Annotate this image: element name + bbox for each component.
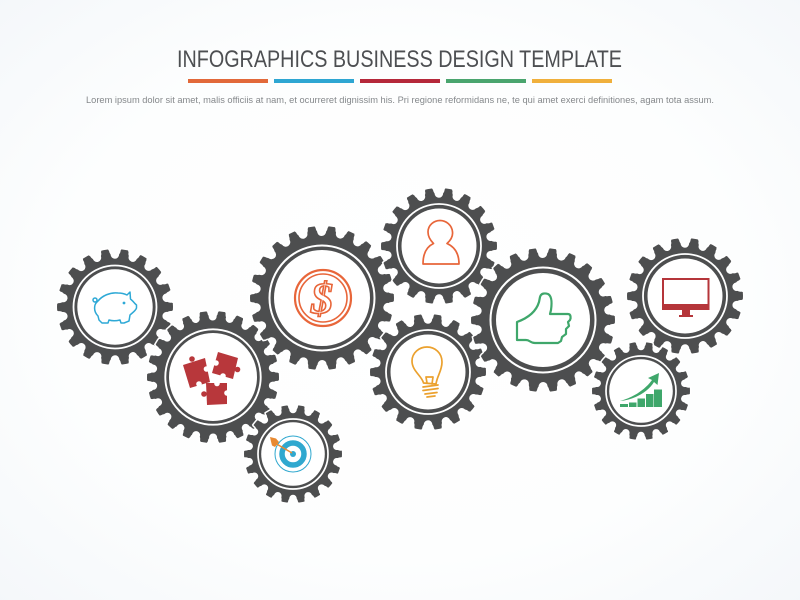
icon: dollar coin: $ bbox=[310, 274, 333, 323]
gear: piggy bank bbox=[56, 248, 174, 366]
icon: light bulb bbox=[412, 347, 442, 397]
gear: growth chart bbox=[590, 340, 692, 442]
title: INFOGRAPHICS BUSINESS DESIGN TEMPLATE bbox=[177, 46, 622, 73]
icon: piggy bank bbox=[93, 292, 136, 323]
icon: thumbs up bbox=[517, 293, 571, 343]
gear: puzzle bbox=[146, 310, 280, 444]
icon: person bbox=[423, 220, 459, 264]
subtitle text: Lorem ipsum dolor sit amet, malis officiis at nam, et ocurreret dignissim his. Pri regione reformidans ne, te qui amet exerci definitiones, agam tota assum. bbox=[86, 95, 714, 106]
colour bars bbox=[188, 79, 612, 83]
gear: light bulb bbox=[368, 312, 488, 432]
icon: growth chart bbox=[620, 373, 662, 407]
gear: thumbs up bbox=[470, 246, 616, 394]
icon: dollar coin bbox=[295, 270, 351, 326]
icon: monitor bbox=[662, 278, 710, 317]
gear: dollar bbox=[248, 224, 396, 372]
gear: monitor bbox=[626, 236, 744, 356]
icon: target with arrow bbox=[270, 436, 311, 472]
icon: puzzle pieces bbox=[183, 352, 240, 405]
gear: person bbox=[380, 186, 498, 306]
gear: target bbox=[242, 404, 344, 504]
